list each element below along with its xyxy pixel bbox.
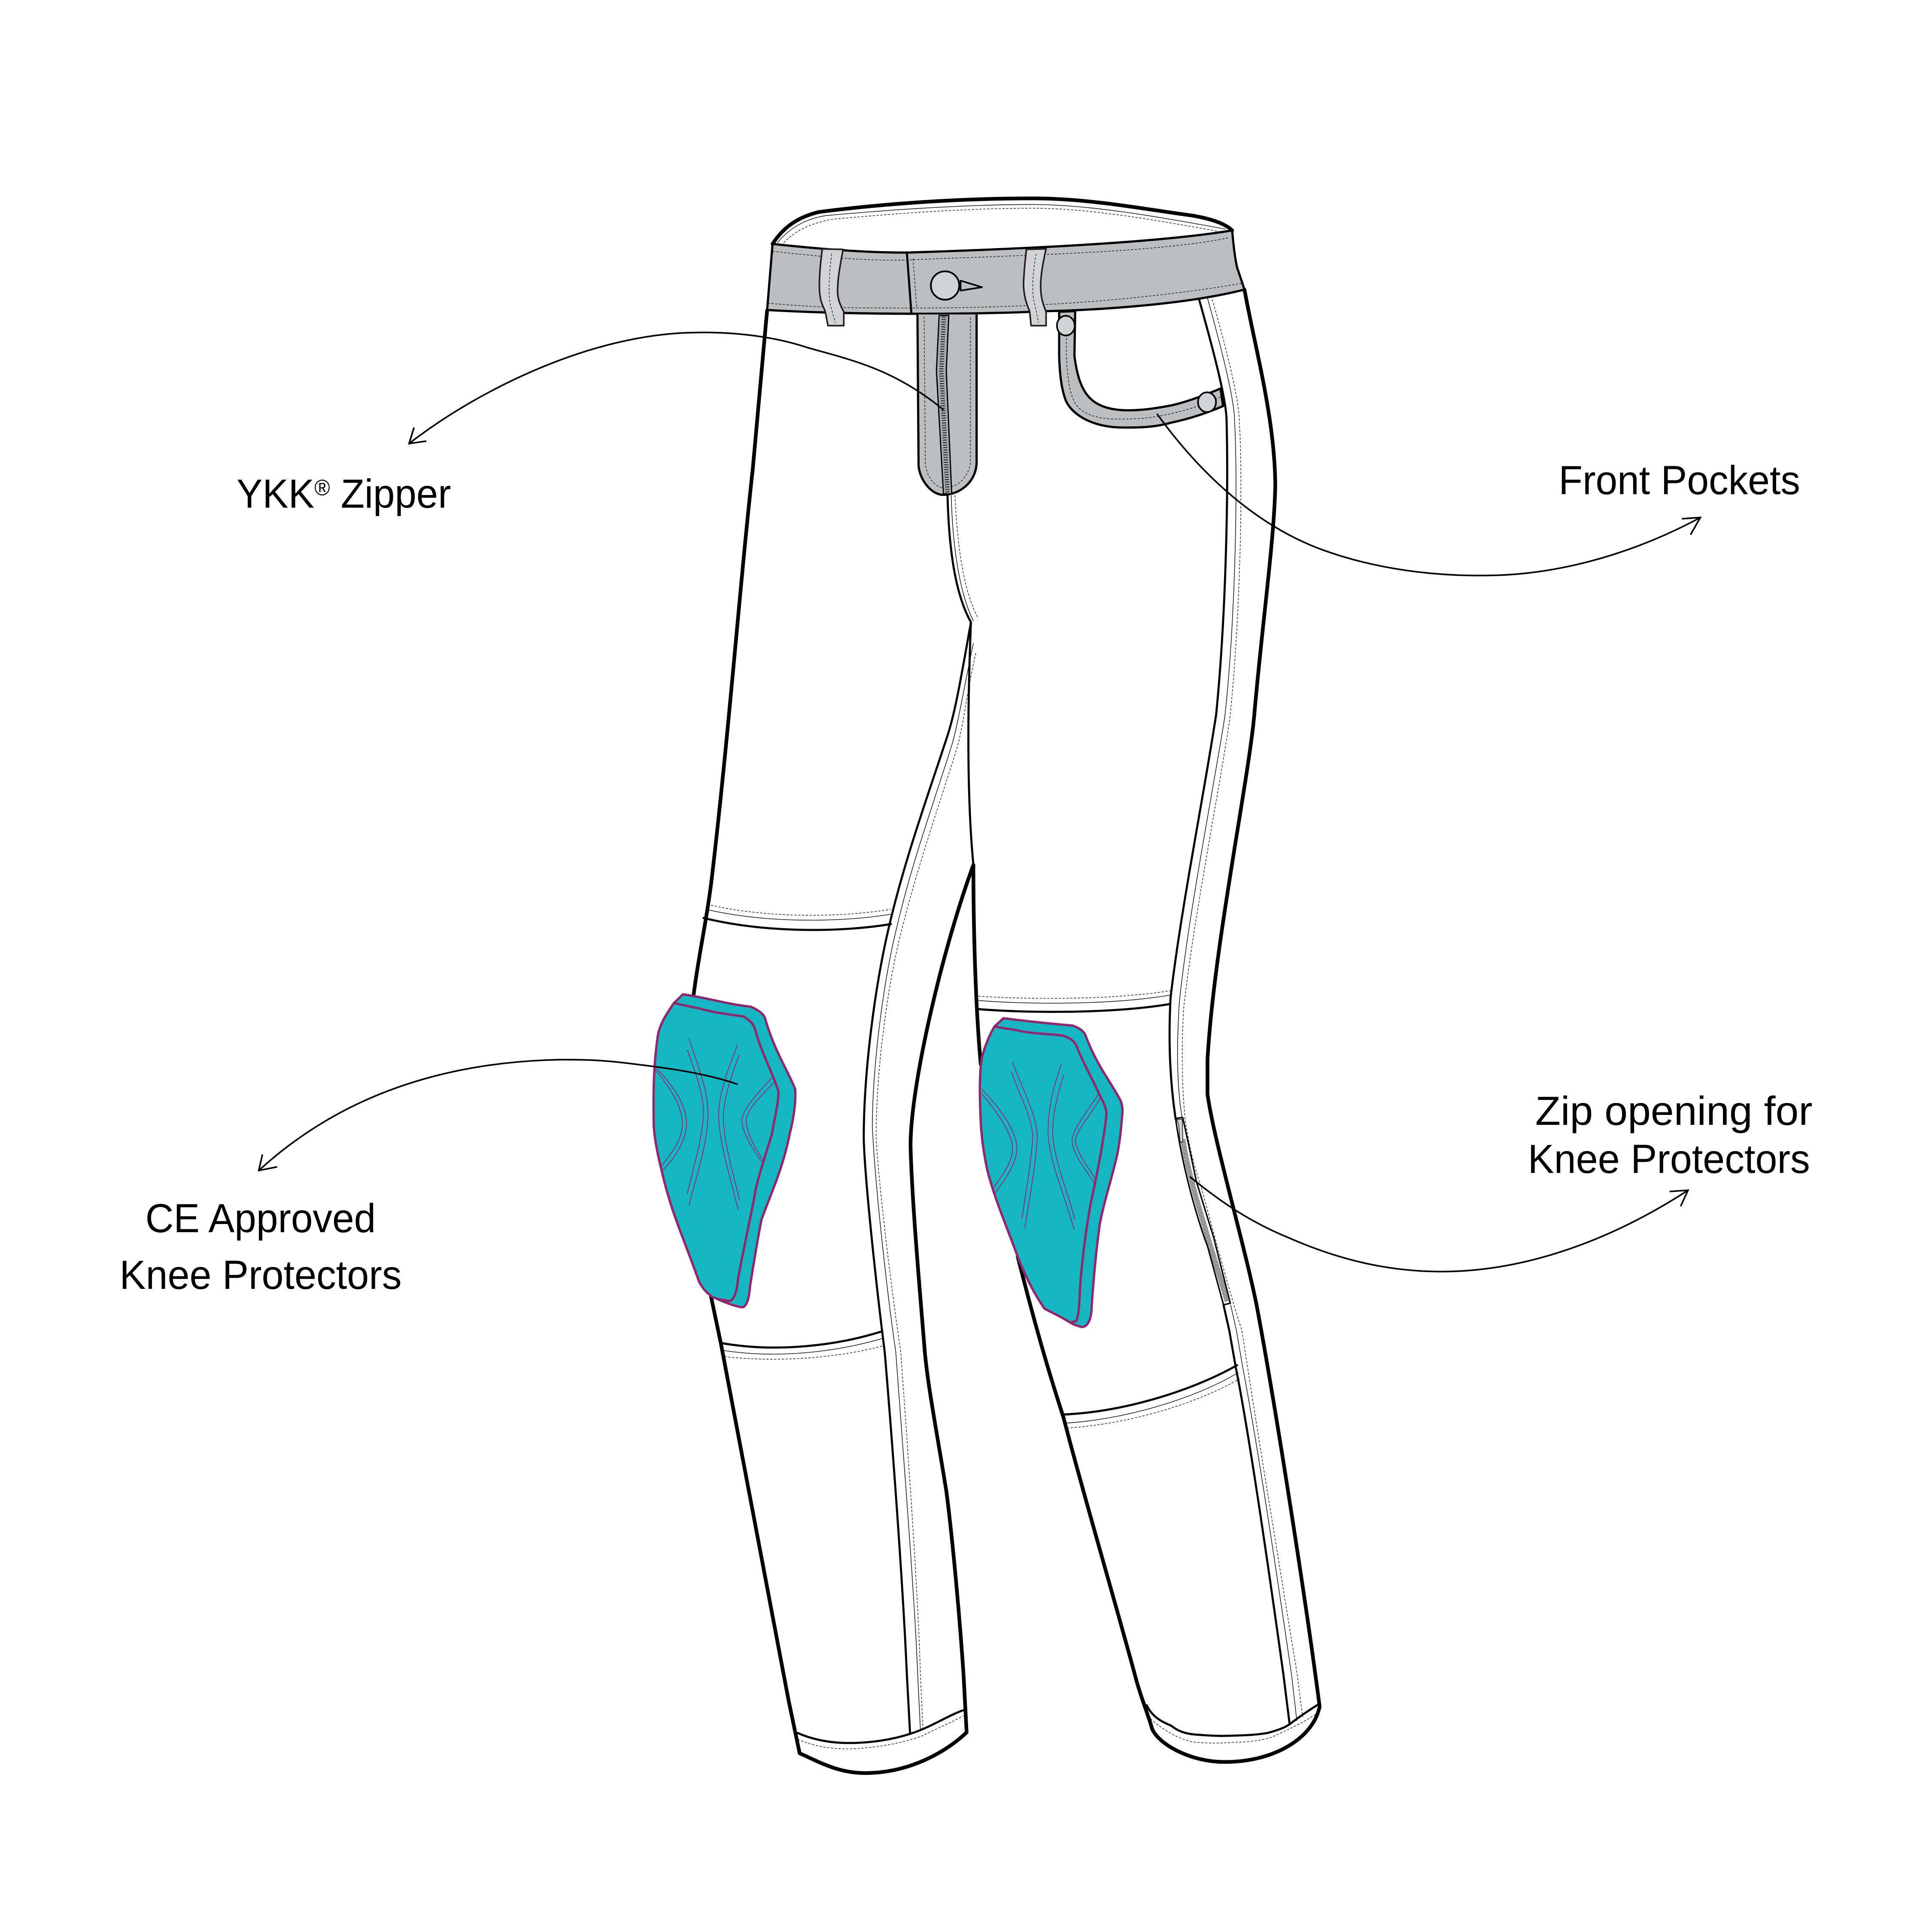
knee zip opening [1176,1118,1230,1305]
arrow: YKK zipper callout [409,332,943,444]
right leg seams [978,990,1239,1428]
left leg seams [704,905,891,1359]
belt loop left [819,249,844,326]
label: front pockets: Front Pockets [1558,458,1800,503]
front pocket [1057,311,1223,428]
label: zip opening for knee protectors: Knee Protectors [1528,1136,1810,1182]
label: zip opening for knee protectors: Zip opening for [1535,1088,1813,1134]
arrow: front pockets callout [1157,414,1700,576]
waist opening [772,198,1232,244]
left knee protector [653,994,796,1307]
right hem [1147,1704,1318,1743]
label: YKK zipper: YKK [237,471,318,516]
zipper fly [917,314,977,495]
waist button [931,271,982,300]
waistband [767,231,1245,314]
belt loop right [1024,249,1046,326]
left leg outlines [694,310,976,1773]
right knee protector [980,1018,1122,1327]
label: CE approved knee protectors [119,1196,402,1298]
label: YKK zipper: Zipper [330,471,451,516]
arrow: zip opening callout [1190,1177,1688,1272]
label: zip opening for knee protectors [1528,1088,1813,1182]
arrow: knee protector callout [259,1060,738,1170]
right leg outlines [948,289,1320,1762]
label: CE approved knee protectors: CE Approved [146,1196,376,1241]
label: YKK zipper: ® [314,475,330,500]
label: CE approved knee protectors: Knee Protectors [119,1252,402,1298]
pants illustration [694,198,1320,1773]
left hem [798,1710,963,1749]
